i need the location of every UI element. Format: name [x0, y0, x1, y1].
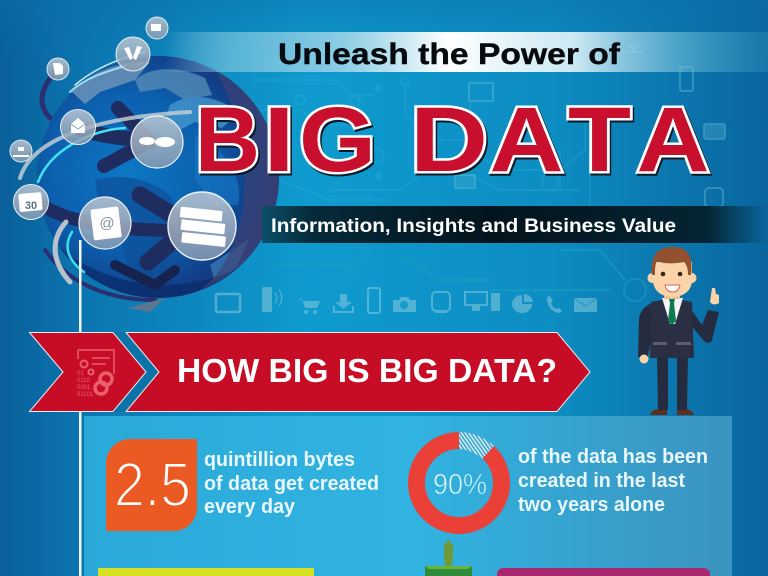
white vertical line [79, 240, 82, 576]
icon: data gears: 01101 [77, 392, 94, 398]
description: of data get created [204, 473, 379, 495]
orbit streaks [20, 52, 190, 282]
pointing arm [688, 305, 719, 343]
icon: data gears: 01 [77, 371, 84, 377]
orange badge [106, 439, 197, 531]
heading shadow: BIG DATA: B [196, 91, 262, 193]
face [653, 262, 692, 297]
heading: BIG DATA [195, 89, 710, 191]
description: two years alone [518, 494, 665, 516]
description [204, 449, 379, 518]
neck [664, 288, 680, 299]
icon: pie chart [512, 294, 533, 313]
orbit trail behind globe [42, 70, 78, 129]
bubble: address book: @ [99, 215, 115, 232]
description [518, 446, 708, 516]
donut ring [416, 440, 502, 526]
hatched segment [459, 432, 494, 459]
legs [657, 355, 688, 410]
top title band [165, 32, 768, 72]
section banner [30, 332, 590, 412]
subtitle: Information, Insights and Business Value [271, 216, 676, 237]
chevron connector [113, 332, 159, 412]
icon: data gears: 0110 [77, 378, 91, 384]
description: quintillion bytes [204, 449, 355, 471]
icon: mail [574, 298, 597, 312]
description: created in the last [518, 470, 685, 492]
heading: BIG DATA: A [636, 89, 710, 191]
heading: BIG DATA: A [490, 89, 564, 191]
heading shadow: BIG DATA: A [491, 91, 565, 193]
right chevron [126, 332, 590, 412]
navy arrow three [45, 250, 155, 300]
icon: tablet [216, 294, 240, 312]
heading: BIG DATA: T [568, 89, 631, 191]
jacket [650, 298, 694, 358]
green cube with person [425, 540, 472, 576]
icon: camera [393, 297, 416, 312]
ears [648, 273, 656, 283]
bubble: mail [60, 110, 96, 144]
heading: BIG DATA: G [299, 89, 376, 191]
yellow card [98, 568, 314, 576]
bubble: server [168, 192, 236, 260]
icon: cart [298, 299, 320, 314]
subtitle band [262, 206, 768, 243]
bubble: chat [131, 116, 183, 168]
heading: Unleash the Power of: Unleash the Power of [278, 38, 621, 71]
globe bottom shade [60, 248, 240, 298]
icon: data gears: 0001 [77, 385, 91, 391]
shirt [662, 298, 683, 324]
stat: 90 percent donut [416, 432, 708, 526]
continents [72, 62, 250, 285]
section heading: HOW BIG IS BIG DATA? [177, 352, 557, 389]
left chevron [30, 332, 146, 412]
bubble: calendar [14, 184, 48, 220]
heading shadow: BIG DATA: I [264, 91, 296, 193]
shoes [650, 409, 694, 415]
description: of the data has been [518, 446, 708, 468]
icon: mobile phone [262, 287, 282, 312]
icon: tablet rounded [432, 292, 450, 313]
icon: smartphone [368, 288, 380, 313]
donut label: 90% [433, 469, 487, 501]
stat: 2.5 quintillion bytes [106, 439, 379, 531]
heading: BIG DATA: D [410, 89, 488, 191]
heading shadow: BIG DATA: G [300, 91, 378, 193]
circuit pattern lower [275, 250, 646, 301]
globe rim shade [200, 70, 279, 290]
hair [652, 247, 692, 275]
heading shadow: BIG DATA: D [412, 91, 490, 193]
bubble: calendar: 30 [25, 200, 37, 212]
icon row [216, 287, 597, 314]
faint header icons [455, 42, 725, 207]
bubble: tablet [146, 17, 168, 39]
panel: how big is big data [84, 416, 732, 576]
back arm [638, 303, 654, 357]
icon: download [334, 294, 353, 312]
magenta card [497, 568, 710, 576]
icon: desktop [465, 292, 500, 311]
pockets [653, 342, 691, 345]
heading shadow: BIG DATA [196, 91, 711, 193]
heading shadow: BIG DATA: A [638, 91, 711, 193]
globe illustration [10, 17, 279, 312]
globe sphere [37, 56, 279, 298]
tie [668, 299, 676, 325]
navy arrow two [45, 195, 190, 262]
bubble: document [47, 58, 69, 80]
businessman [638, 247, 719, 415]
number 2.5: 2.5 [114, 451, 191, 520]
circuit pattern background [240, 78, 590, 210]
smile [665, 285, 680, 292]
bubble: address book [79, 197, 131, 249]
description: every day [204, 496, 296, 518]
heading: BIG DATA: B [195, 89, 260, 191]
navy arrow one [78, 108, 150, 166]
icon: handset [547, 296, 562, 313]
bubble: network [10, 140, 32, 162]
heading: BIG DATA: I [263, 89, 295, 191]
eyes [661, 272, 665, 276]
pointing hand [710, 288, 719, 304]
heading shadow: BIG DATA: T [570, 91, 632, 193]
bubble: phones [116, 37, 150, 71]
icon: data gears [77, 350, 114, 398]
